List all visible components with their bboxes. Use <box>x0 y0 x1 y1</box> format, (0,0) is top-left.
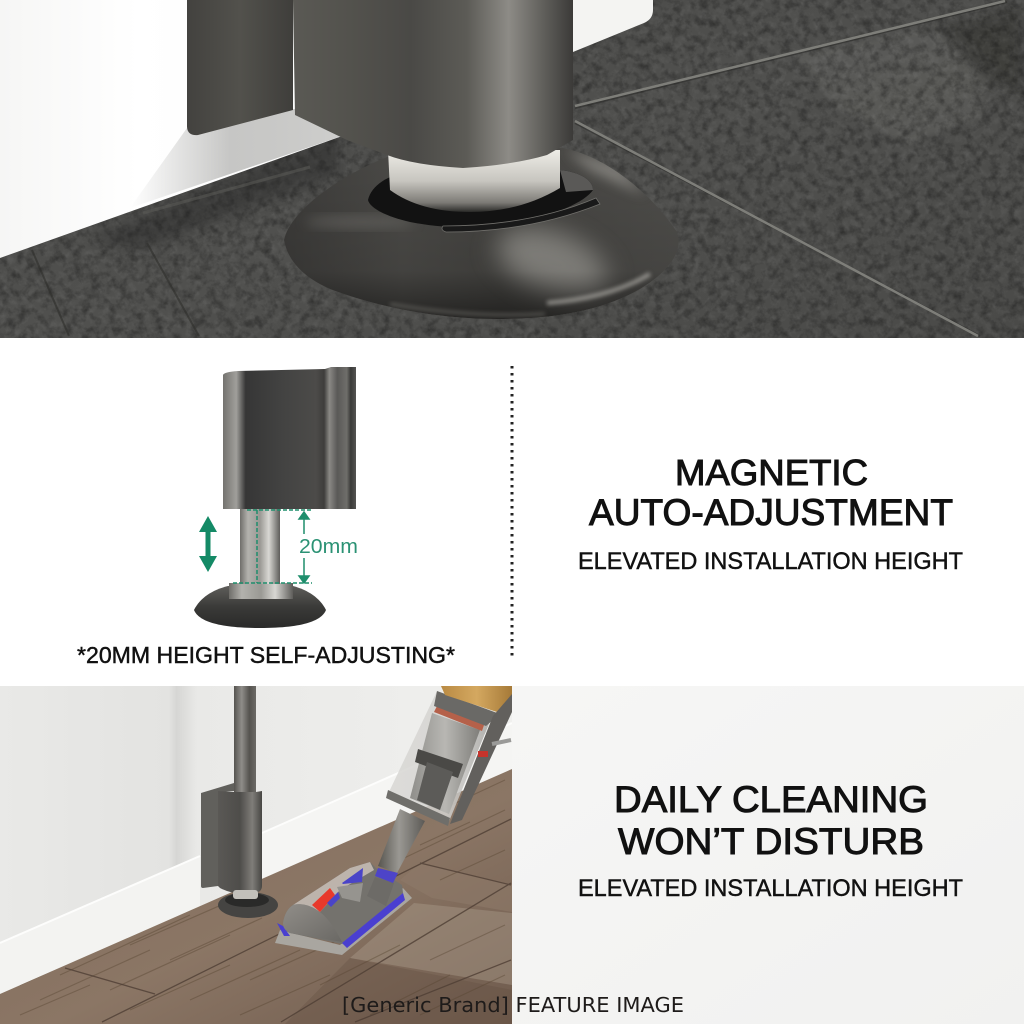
cable <box>492 740 511 744</box>
heading: magnetic auto-adjustment: MAGNETIC <box>675 452 868 493</box>
heading: daily cleaning <box>614 779 928 862</box>
slate floor <box>0 0 1024 338</box>
bin rim <box>386 790 450 826</box>
red brush <box>312 888 335 912</box>
dust bin <box>388 691 493 824</box>
dark recess <box>368 170 593 227</box>
main gunmetal body <box>293 0 573 168</box>
heading: daily cleaning: WON’T DISTURB <box>618 821 924 862</box>
diagram caption: *20MM HEIGHT SELF-ADJUSTING* <box>77 642 455 668</box>
dark handle <box>450 694 512 824</box>
panel: height adjustment diagram <box>0 338 1024 686</box>
dimension lines <box>233 510 312 583</box>
green double arrow <box>199 516 217 572</box>
heading: magnetic auto-adjustment: AUTO-ADJUSTMENT <box>589 492 953 533</box>
round magnetic base <box>284 148 679 319</box>
baseboard <box>0 723 512 994</box>
recess right highlight <box>560 170 593 192</box>
blue brush <box>327 868 363 907</box>
floor base <box>218 890 278 918</box>
wall <box>0 686 512 942</box>
neck <box>367 877 394 906</box>
caption: feature image: [Generic Brand] FEATURE IMAGE <box>342 993 684 1017</box>
white wall right <box>573 0 653 52</box>
head silhouette <box>283 862 403 944</box>
lower dark cylinder <box>417 762 453 810</box>
adjustment post <box>240 509 280 584</box>
heading: daily cleaning: DAILY CLEANING <box>614 779 928 820</box>
wood floor <box>0 769 512 1024</box>
grey cap <box>434 691 500 726</box>
purple coil <box>375 868 398 883</box>
panel: top product photo on slate floor <box>0 0 1024 338</box>
small base <box>194 583 326 628</box>
bracket head <box>223 367 356 509</box>
gold cyclone <box>441 686 512 712</box>
panel: right background <box>512 686 1024 1024</box>
blue plate strip <box>277 893 405 948</box>
vacuum cleaner <box>275 686 512 955</box>
text block: magnetic auto-adjustment <box>578 452 963 575</box>
white background <box>0 338 1024 686</box>
saddle <box>337 883 363 902</box>
panel: daily cleaning photo <box>0 686 512 1024</box>
text block: daily cleaning <box>578 779 963 902</box>
bracket <box>201 783 262 894</box>
red trigger <box>478 751 488 757</box>
dark shroud band <box>415 749 463 778</box>
subheading: ELEVATED INSTALLATION HEIGHT <box>578 548 963 575</box>
dotted divider <box>510 366 514 660</box>
brush bar <box>293 862 374 912</box>
subheading: ELEVATED INSTALLATION HEIGHT <box>578 875 963 902</box>
wand <box>378 809 425 873</box>
inner cylinder <box>410 713 480 814</box>
20mm label: 20mm <box>299 536 358 558</box>
mop pad <box>275 888 412 955</box>
wall mounting plate <box>187 0 293 135</box>
curved slit <box>442 198 600 232</box>
heading: magnetic auto-adjustment <box>589 452 953 533</box>
silver post <box>388 150 560 212</box>
front lobe <box>283 904 342 942</box>
pole <box>234 686 256 795</box>
orange band <box>434 706 484 731</box>
white wall left <box>0 0 345 258</box>
